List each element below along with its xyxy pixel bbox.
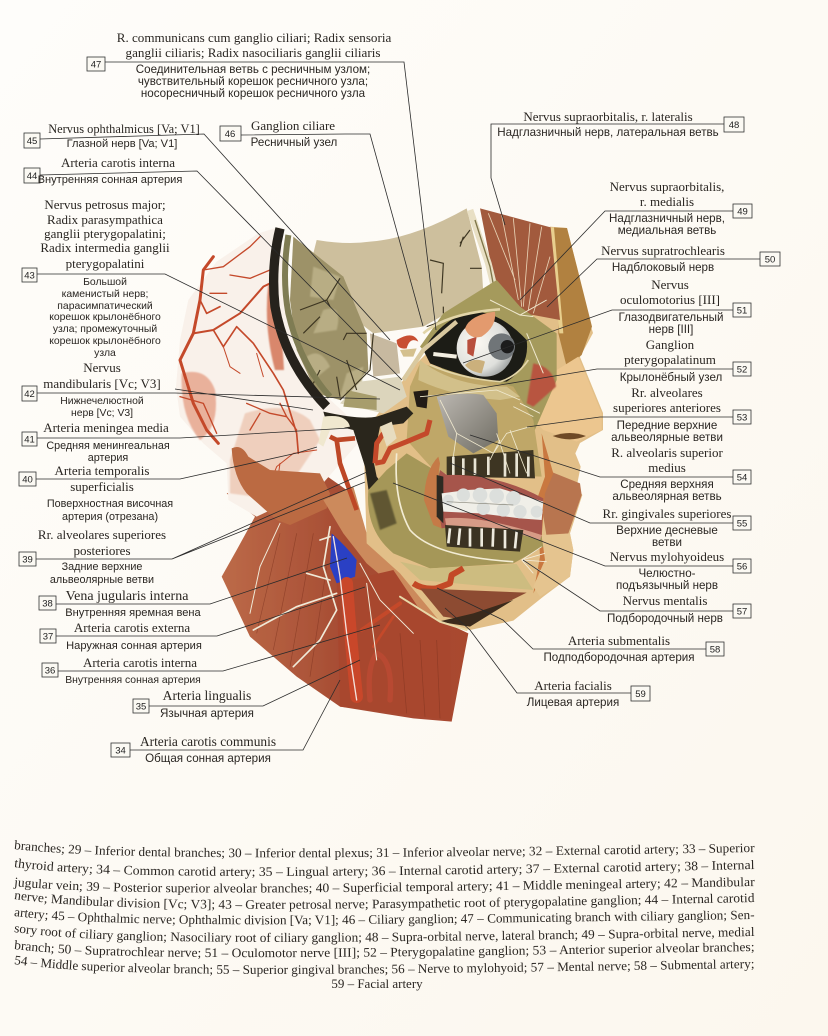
label 49: r. medialis — [640, 194, 694, 209]
label 40 — [19, 463, 173, 523]
maxillary sinus — [437, 394, 498, 453]
label 36: Внутренняя сонная артерия — [65, 675, 201, 686]
label 39 — [19, 527, 166, 586]
facial artery on jaw — [413, 568, 463, 589]
label 43: каменистый нерв; — [62, 289, 148, 300]
label 47 — [87, 30, 391, 100]
label 37: 37 — [43, 632, 53, 642]
label 48 — [497, 109, 744, 139]
label 55: ветви — [652, 536, 682, 549]
label 45: Nervus ophthalmicus [Va; V1] — [48, 122, 200, 136]
label 35 — [133, 688, 254, 720]
label 52: pterygopalatinum — [624, 352, 716, 367]
label 56 — [610, 549, 751, 592]
label 38: 38 — [42, 598, 53, 610]
label 38: Vena jugularis interna — [66, 589, 189, 604]
label 58: Arteria submentalis — [568, 633, 670, 648]
caption text: branch; 50 – Supratrochlear nerve; 51 – Oculomotor nerve [III]; 52 – Pterygopalatine ganglion; 53 – Anterior superior alveolar branches; — [14, 940, 754, 959]
label 41: артерия — [88, 452, 128, 464]
caption text — [13, 840, 755, 991]
label 44 — [24, 155, 182, 186]
label 53: superiores anteriores — [613, 400, 721, 415]
label 47: 47 — [91, 60, 101, 70]
label 54: альвеолярная ветвь — [612, 490, 722, 503]
inferior alveolar nerve — [396, 453, 513, 562]
label 53 — [611, 385, 751, 444]
label 57: 57 — [737, 606, 747, 618]
label 39: posteriores — [73, 543, 131, 558]
neck straps — [337, 570, 452, 720]
lower gum — [445, 518, 542, 540]
nose shading and nostril — [533, 357, 602, 442]
label 41 — [22, 420, 170, 464]
label 34: 34 — [115, 746, 126, 756]
label 43: корешок крылонёбного — [49, 311, 161, 323]
label 39: 39 — [22, 554, 33, 566]
label 42: 42 — [24, 389, 35, 400]
label 41: Средняя менингеальная — [46, 440, 170, 452]
frontal muscle — [480, 208, 560, 320]
label 49: медиальная ветвь — [618, 224, 716, 237]
label 56: 56 — [737, 562, 747, 572]
label 37: Наружная сонная артерия — [66, 640, 202, 652]
label 43: Большой — [83, 277, 127, 288]
label 42: mandibularis [Vc; V3] — [43, 376, 161, 391]
label 44: 44 — [27, 171, 37, 182]
label 49 — [609, 179, 752, 237]
label 58: 58 — [710, 644, 720, 656]
jaw and digastric muscle — [323, 487, 513, 627]
label 42 — [22, 360, 161, 419]
label 57: Nervus mentalis — [623, 593, 707, 608]
label 48: Надглазничный нерв, латеральная ветвь — [497, 126, 719, 139]
label 37 — [40, 620, 202, 652]
pterygoid bone — [380, 422, 397, 447]
label 41: 41 — [24, 434, 35, 446]
label 46: Ресничный узел — [251, 136, 337, 149]
cheek muscle strip — [533, 433, 553, 593]
label 43: корешок крылонёбного — [49, 335, 161, 347]
lower jaw cream band — [400, 562, 533, 590]
label 51: нерв [III] — [649, 323, 693, 336]
leader lines — [36, 62, 760, 750]
label 46 — [220, 118, 337, 149]
label 39: Задние верхние — [62, 561, 142, 573]
label 55: Rr. gingivales superiores — [603, 506, 731, 521]
label 37: Arteria carotis externa — [74, 620, 190, 635]
face skin — [363, 227, 603, 630]
label 49: Надглазничный нерв, — [609, 212, 725, 225]
mastoid bone — [318, 416, 350, 447]
skull cut edge — [274, 228, 327, 407]
label 36: Arteria carotis interna — [83, 655, 197, 670]
label 43: узла — [94, 348, 116, 359]
caption text: branches; 29 – Inferior dental branches; 30 – Inferior dental plexus; 31 – Inferior alveolar nerve; 32 – External carotid artery; 33 – Superior — [14, 840, 754, 860]
upper teeth — [442, 488, 543, 520]
label 41: Arteria meningea media — [43, 420, 169, 435]
label 59: 59 — [635, 689, 646, 700]
brain and skull cavity — [290, 208, 483, 413]
label 48: 48 — [729, 120, 739, 131]
label 40: superficialis — [70, 479, 134, 494]
label 42: Nervus — [83, 360, 121, 375]
orbit — [423, 309, 528, 382]
maxillary artery — [375, 420, 430, 463]
label 45 — [24, 122, 200, 150]
lateral wall strip and jaw muscle — [368, 453, 543, 568]
label 47: Соединительная ветвь с ресничным узлом; — [136, 63, 370, 76]
caption text: nerve; Mandibular division [Vc; V3]; 43 – Greater petrosal nerve; Parasympathetic root of pterygopalatine ganglion; 44 – Internal carotid — [14, 893, 754, 912]
label 34: Общая сонная артерия — [145, 752, 271, 765]
label 40: 40 — [22, 474, 33, 486]
label 35: Arteria lingualis — [163, 688, 251, 703]
label 34 — [111, 734, 276, 765]
caption text: sory root of ciliary ganglion; Nasociliary root of ciliary ganglion; 48 – Supra-orbital nerve, lateral branch; 49 – Supra-orbital nerve, medial — [14, 926, 754, 945]
label 55: Верхние десневые — [616, 524, 718, 537]
label 54: R. alveolaris superior — [611, 445, 723, 460]
label 44: Внутренняя сонная артерия — [38, 174, 182, 186]
label 51: Nervus — [651, 277, 689, 292]
label 43: Radix parasympathica — [47, 212, 163, 227]
label 51: Глазодвигательный — [619, 311, 723, 324]
label 36 — [42, 655, 201, 686]
label 43: Radix intermedia ganglii — [40, 240, 170, 255]
label 52: 52 — [737, 364, 747, 376]
label 56: Nervus mylohyoideus — [610, 549, 724, 564]
label 56: Челюстно- — [638, 567, 696, 580]
label 53: 53 — [737, 412, 747, 424]
label 47: носоресничный корешок ресничного узла — [141, 87, 366, 100]
caption text: 59 – Facial artery — [331, 976, 423, 991]
label 42: нерв [Vc; V3] — [71, 408, 133, 419]
label 53: Rr. alveolares — [631, 385, 703, 400]
label 54: 54 — [737, 472, 747, 484]
label 49: 49 — [737, 206, 748, 218]
infratemporal dark space — [323, 407, 413, 500]
caption text: jugular vein; 39 – Posterior superior alveolar branches; 40 – Superficial temporal artery; 41 – Middle meningeal artery; 42 – Mandibular — [13, 877, 755, 895]
carotid arteries neck — [347, 583, 400, 700]
label 52: Крылонёбный узел — [620, 371, 722, 384]
label 45: Глазной нерв [Va; V1] — [67, 138, 177, 150]
label 36: 36 — [45, 666, 55, 676]
label 51 — [619, 277, 751, 336]
label 54 — [611, 445, 751, 503]
lips — [542, 470, 582, 537]
label 43: 43 — [24, 270, 35, 282]
label 49: Nervus supraorbitalis, — [610, 179, 724, 194]
label 58: Подподбородочная артерия — [543, 651, 695, 664]
carotid siphon in cavity — [397, 335, 418, 349]
label 43: парасимпатический — [57, 301, 153, 312]
label 52: Ganglion — [646, 337, 695, 352]
label 54: Средняя верхняя — [620, 478, 714, 491]
label 47: R. communicans cum ganglio ciliari; Radix sensoria — [117, 30, 391, 45]
label 40: Arteria temporalis — [55, 463, 149, 478]
cervical arteries upper — [330, 437, 357, 510]
label 50 — [601, 243, 780, 274]
sternocleidomastoid muscle — [232, 447, 330, 525]
label 57: Подбородочный нерв — [607, 612, 723, 625]
jugular vein — [330, 533, 357, 583]
label 40: Поверхностная височная — [47, 498, 173, 510]
cheek mucosa strip — [424, 457, 442, 528]
label 53: Передние верхние — [617, 419, 717, 432]
label 54: medius — [648, 460, 686, 475]
label 38 — [39, 589, 202, 619]
orbital olive bone — [420, 280, 557, 433]
label 48: Nervus supraorbitalis, r. lateralis — [523, 109, 693, 124]
lower lip and chin skin — [533, 533, 573, 597]
label 43: ganglii pterygopalatini; — [44, 226, 166, 241]
lower tooth roots — [445, 525, 523, 552]
caption text: 54 – Middle superior alveolar branch; 55 – Superior gingival branches; 56 – Nerve to mylohyoid; 57 – Mental nerve; 58 – Submental artery; — [14, 956, 754, 977]
label 53: альвеолярные ветви — [611, 431, 723, 444]
optic nerve and ophthalmic nerve — [403, 322, 457, 380]
caption text: artery; 45 – Ophthalmic nerve; Ophthalmic division [Va; V1]; 46 – Ciliary ganglion; 47 – Communicating branch with ciliary ganglion; Sen- — [14, 910, 754, 927]
lacrimal gland — [465, 312, 495, 337]
label 50: Надблоковый нерв — [612, 261, 714, 274]
upper jaw and cheek bone — [407, 363, 542, 477]
label 59: Лицевая артерия — [527, 696, 619, 709]
mental nerve fan — [522, 547, 547, 573]
label 46: 46 — [225, 129, 235, 140]
upper tooth roots — [447, 450, 535, 478]
label 51: oculomotorius [III] — [620, 292, 720, 307]
label 50: 50 — [765, 254, 775, 266]
label 47: ganglii ciliaris; Radix nasociliaris ganglii ciliaris — [126, 45, 380, 60]
label 43: Nervus petrosus major; — [44, 197, 166, 212]
label 47: чувствительный корешок ресничного узла; — [138, 75, 368, 88]
upper and lower dark teeth bed — [437, 475, 443, 523]
mouth interior — [437, 470, 543, 537]
forehead dark skin — [552, 227, 592, 367]
label 57 — [607, 593, 751, 625]
label 42: Нижнечелюстной — [60, 396, 144, 407]
label 55: 55 — [737, 518, 747, 530]
label 55 — [603, 506, 751, 549]
muscle fibres of neck — [257, 533, 440, 718]
label 39: Rr. alveolares superiores — [38, 527, 166, 542]
label 58 — [543, 633, 724, 664]
label 39: альвеолярные ветви — [50, 574, 154, 586]
label 35: Язычная артерия — [160, 707, 254, 720]
label 40: артерия (отрезана) — [62, 511, 158, 523]
label 50: Nervus supratrochlearis — [601, 243, 725, 258]
cervical nerves — [250, 523, 467, 700]
label 35: 35 — [136, 702, 146, 712]
submandibular muscle — [420, 588, 527, 621]
label 56: подъязычный нерв — [616, 579, 718, 592]
illustration: dissected head — [176, 208, 603, 722]
label 59: Arteria facialis — [534, 678, 612, 693]
label 43: узла; промежуточный — [53, 324, 157, 335]
label 59 — [527, 678, 650, 709]
facial nerves over maxilla — [420, 300, 547, 473]
neck muscles — [222, 467, 468, 722]
label 46: Ganglion ciliare — [251, 118, 335, 133]
caption text: thyroid artery; 34 – Common carotid artery; 35 – Lingual artery; 36 – Internal carotid artery; 37 – External carotid artery; 38 – Internal — [14, 858, 754, 879]
label 43 — [22, 197, 170, 359]
label 52 — [620, 337, 751, 384]
label 34: Arteria carotis communis — [140, 734, 276, 749]
scalp with arteries — [176, 227, 367, 517]
eyeball — [457, 320, 515, 377]
label 51: 51 — [737, 306, 747, 316]
label 38: Внутренняя яремная вена — [65, 607, 202, 619]
label 44: Arteria carotis interna — [61, 155, 175, 170]
label 43: pterygopalatini — [66, 256, 145, 271]
label 45: 45 — [27, 136, 37, 147]
